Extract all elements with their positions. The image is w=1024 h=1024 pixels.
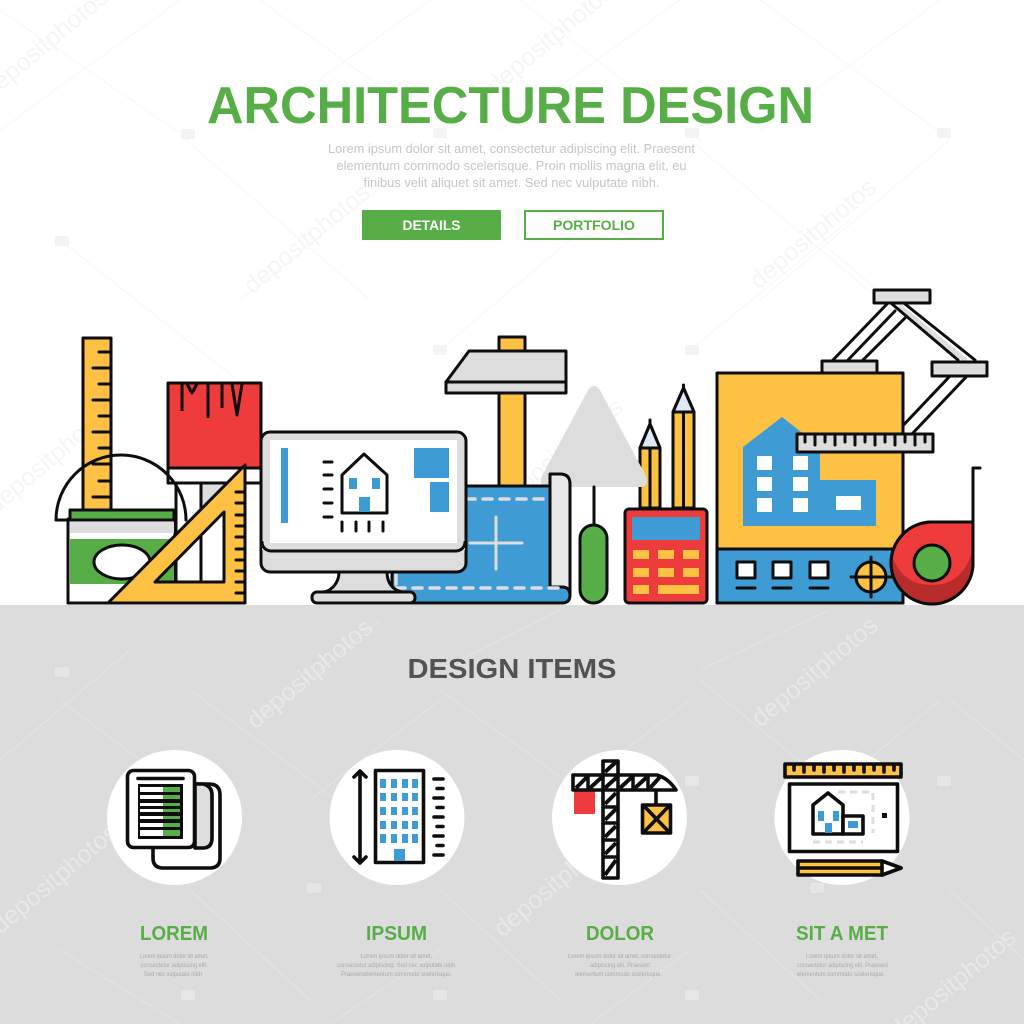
vertical ruler xyxy=(83,338,111,513)
title: ARCHITECTURE DESIGN xyxy=(207,77,814,135)
label: LOREM xyxy=(140,923,208,945)
board buttons xyxy=(737,562,828,588)
icon circle: tower xyxy=(330,750,464,885)
building plan xyxy=(743,417,876,526)
description: Lorem ipsum dolor sit amet, consectetur xyxy=(568,953,672,960)
section heading: DESIGN ITEMS xyxy=(408,653,616,684)
stock watermark: depositphotos xyxy=(241,613,378,735)
description xyxy=(797,953,888,978)
stock watermark: depositphotos xyxy=(238,178,375,300)
stock watermark: depositphotos xyxy=(744,173,881,295)
button: portfolio: PORTFOLIO xyxy=(553,217,635,233)
button: details: DETAILS xyxy=(402,217,460,233)
description: consectetur adipiscing. Sed nec vulputate nibh xyxy=(337,962,455,969)
description xyxy=(140,953,209,978)
trowel xyxy=(541,386,647,603)
description: consectetur adipiscing elit. Praesent xyxy=(797,962,888,969)
parallel ruler xyxy=(797,434,933,452)
stock watermark: depositphotos xyxy=(746,611,883,733)
protractor dome xyxy=(56,455,186,520)
icon circle: documents xyxy=(107,750,242,885)
calculator xyxy=(625,509,707,603)
description: Sed nec vulputate nibh xyxy=(144,971,202,978)
intro paragraph: finibus velit aliquet sit amet. Sed nec vulputate nibh. xyxy=(364,175,660,190)
label: DOLOR xyxy=(586,923,655,945)
icon circle: crane xyxy=(552,750,687,885)
description: Lorem ipsum dolor sit amet, xyxy=(361,953,432,960)
crosshair knob xyxy=(851,557,891,597)
icon circle: plan and tools xyxy=(774,750,910,885)
set square xyxy=(108,465,245,603)
description xyxy=(337,953,455,978)
button: portfolio xyxy=(525,211,663,239)
intro paragraph: Lorem ipsum dolor sit amet, consectetur adipiscing elit. Praesent xyxy=(328,141,695,156)
drafting lamp arms xyxy=(822,290,987,434)
hammer xyxy=(446,337,566,487)
drawing board xyxy=(717,373,903,603)
description: Praesentelementum commodo scelerisque. xyxy=(341,971,452,978)
description: adipiscing elit. Praesent xyxy=(590,962,650,969)
pencil: small xyxy=(640,420,660,508)
button: details xyxy=(362,210,501,240)
item: ipsum xyxy=(330,750,464,978)
tape measure xyxy=(891,468,980,604)
paint bucket xyxy=(68,510,175,603)
intro paragraph xyxy=(328,141,695,190)
description: Lorem ipsum dolor sit amet, xyxy=(140,953,209,960)
stock watermark: depositphotos xyxy=(488,821,625,943)
illustration: architecture tools xyxy=(56,290,987,604)
description xyxy=(568,953,672,978)
stock watermark: depositphotos xyxy=(491,393,628,515)
description: Lorem ipsum dolor sit amet, xyxy=(806,953,878,960)
description: elementum commodo scelerisque. xyxy=(797,971,885,978)
intro paragraph: elementum commodo scelerisque. Proin mollis magna elit, eu xyxy=(336,158,686,173)
blueprint roll xyxy=(392,474,570,603)
item: dolor xyxy=(552,750,687,978)
label: SIT A MET xyxy=(796,923,888,945)
pencil: large xyxy=(673,385,694,508)
item: sit a met xyxy=(774,750,910,978)
paint brush xyxy=(168,383,261,603)
description: elementum commodo scelerisque. xyxy=(575,971,662,978)
desktop monitor xyxy=(261,432,466,603)
label: IPSUM xyxy=(366,923,427,945)
lower grey section background xyxy=(0,605,1024,1024)
item: lorem xyxy=(107,750,242,978)
description: consectetur adipiscing elit. xyxy=(140,962,208,969)
